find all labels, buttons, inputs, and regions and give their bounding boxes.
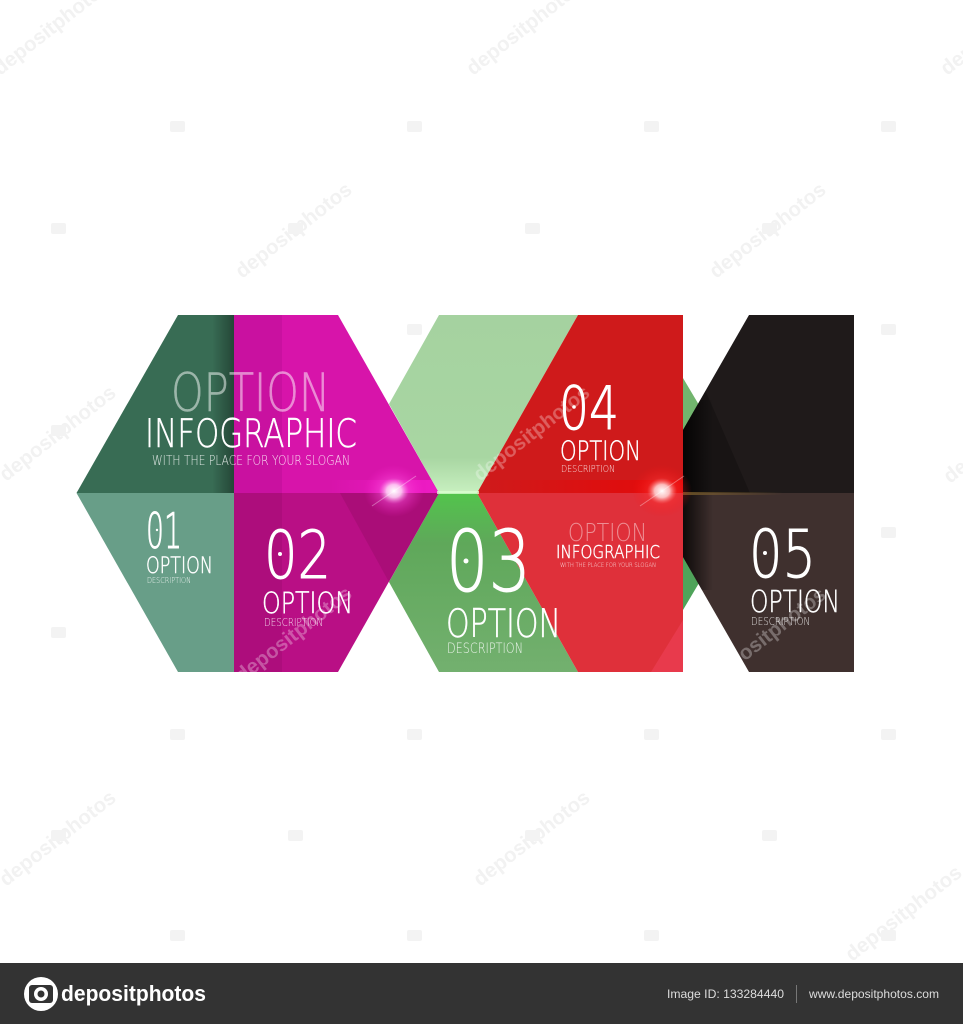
option 03: OPTION [446, 602, 561, 647]
watermarks: depositphotos [841, 861, 963, 966]
option 03: DESCRIPTION [447, 641, 523, 657]
panel: black block 05 [683, 315, 854, 672]
panel: magenta hexagon 02 [234, 315, 439, 672]
option 04: OPTION [560, 436, 641, 467]
heading: option infographic [145, 363, 357, 469]
option 03: 03 [446, 513, 531, 612]
logo text: depositphotos [61, 981, 206, 1006]
panel: hexagon 01 [76, 315, 234, 672]
option 05: OPTION [750, 585, 840, 620]
watermarks: depositphotos [469, 786, 594, 891]
option 05: DESCRIPTION [751, 615, 810, 628]
heading: option infographic: WITH THE PLACE FOR YOUR SLOGAN [152, 454, 350, 469]
option 02: 02 [264, 517, 331, 594]
small heading: option infographic: WITH THE PLACE FOR YOUR SLOGAN [560, 561, 656, 569]
divider [796, 985, 797, 1003]
option 03 [446, 513, 561, 657]
website: www.depositphotos.com [808, 987, 939, 1001]
option 01 [146, 503, 213, 585]
heading: option infographic: OPTION [171, 363, 330, 424]
watermarks over artwork [231, 381, 830, 688]
panel: green hexagon 03 [389, 315, 699, 672]
option 01: OPTION [146, 554, 213, 579]
option 05 [749, 516, 840, 628]
option 01: DESCRIPTION [147, 576, 191, 585]
watermarks: depositphotos [231, 178, 356, 283]
small heading: option infographic [556, 518, 660, 569]
option 04: 04 [559, 374, 619, 444]
small heading: option infographic: OPTION [568, 518, 647, 547]
option 02: DESCRIPTION [264, 616, 323, 629]
option 02: OPTION [262, 586, 353, 620]
option 05: 05 [749, 516, 816, 593]
option 01: 01 [146, 503, 182, 560]
watermarks: depositphotos [705, 178, 830, 283]
small heading: option infographic: INFOGRAPHIC [556, 542, 660, 563]
panel: red block 04 [477, 315, 683, 672]
icon: camera logo [24, 977, 58, 1011]
watermarks over artwork: depositphotos [231, 582, 356, 687]
option 04: DESCRIPTION [561, 464, 615, 475]
watermark camera icons [51, 121, 896, 941]
watermarks over artwork: depositphotos [705, 583, 830, 688]
footer bar [0, 963, 963, 1024]
light flares [364, 465, 692, 517]
image id: Image ID: 133284440 [667, 987, 784, 1001]
option 02 [262, 517, 353, 629]
heading: option infographic: INFOGRAPHIC [145, 412, 357, 457]
watermarks over artwork: depositphotos [469, 381, 594, 486]
option 04 [559, 374, 641, 475]
